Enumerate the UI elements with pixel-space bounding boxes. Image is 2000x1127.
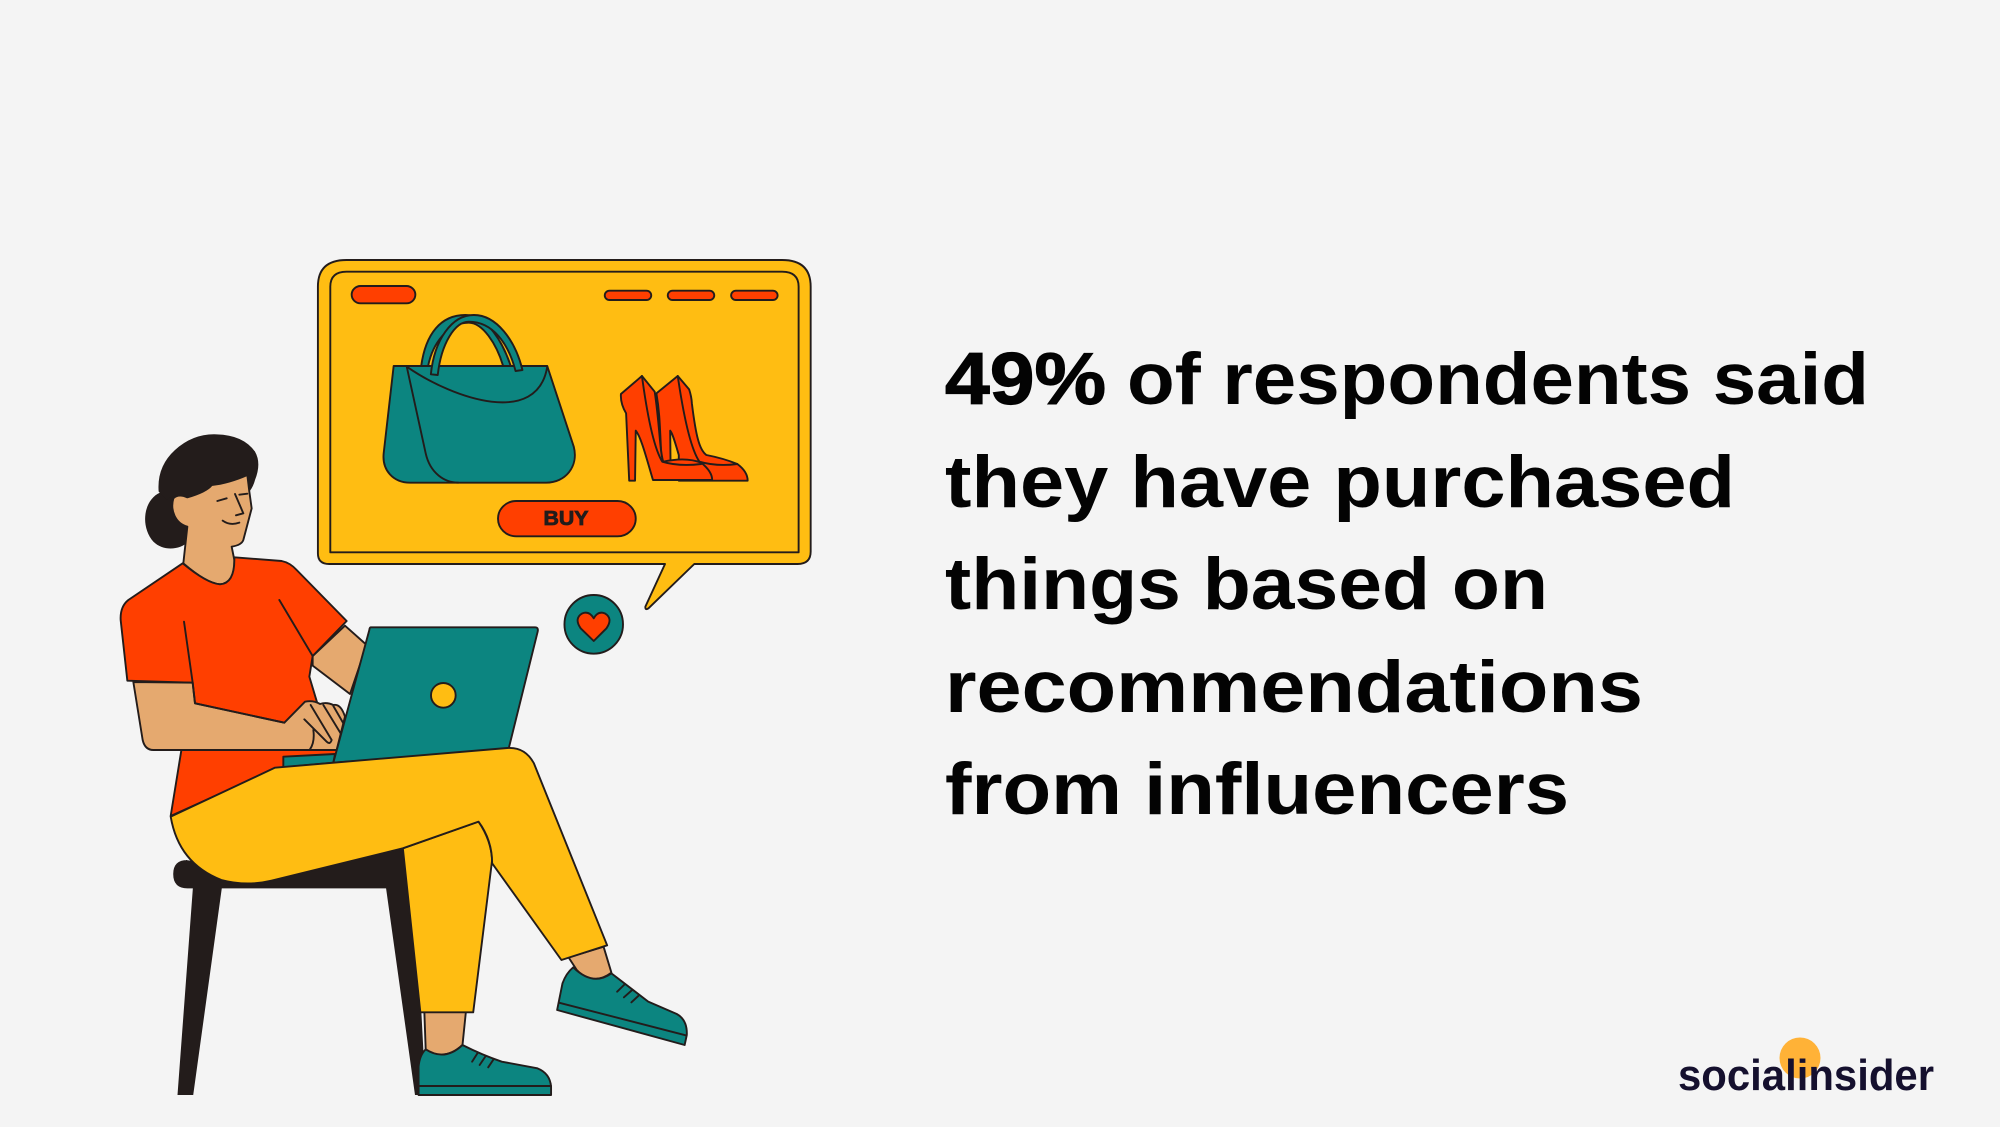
window header pills [352,286,778,303]
far arm [313,626,367,694]
shirt [121,557,347,816]
headline statistic: from influencers [945,749,1569,830]
hair bun [145,493,188,549]
headline statistic [945,339,1869,830]
hair [158,434,258,500]
headline statistic: they have purchased [945,442,1735,523]
speech bubble: online shop window [318,260,811,609]
logo: socialinsider: socialinsider [1678,1051,1934,1100]
face and neck [172,475,252,584]
torso, arms, head [121,434,538,816]
near arm [133,682,345,750]
buy button shape [498,501,636,536]
icon: high heels [621,376,748,481]
icon: heart badge [564,595,623,654]
inner window frame [330,272,799,552]
illustration: woman shopping on a laptop [121,434,687,1095]
bubble outline [318,260,811,609]
facial features [217,494,247,524]
shirt seams and hand details [184,600,344,749]
icon: handbag [384,315,575,483]
laptop logo [431,683,456,708]
headline statistic: things based on [945,544,1548,625]
buy button label: BUY [544,508,589,530]
laptop lid [333,627,538,763]
laptop base [283,754,335,767]
back leg with ankle and shoe [403,822,551,1095]
headline statistic: recommendations [945,647,1643,728]
headline statistic: 49% [945,339,1106,420]
headline statistic: of respondents said [1127,339,1869,420]
pants: crossed leg [171,748,687,1045]
chair [173,848,426,1095]
